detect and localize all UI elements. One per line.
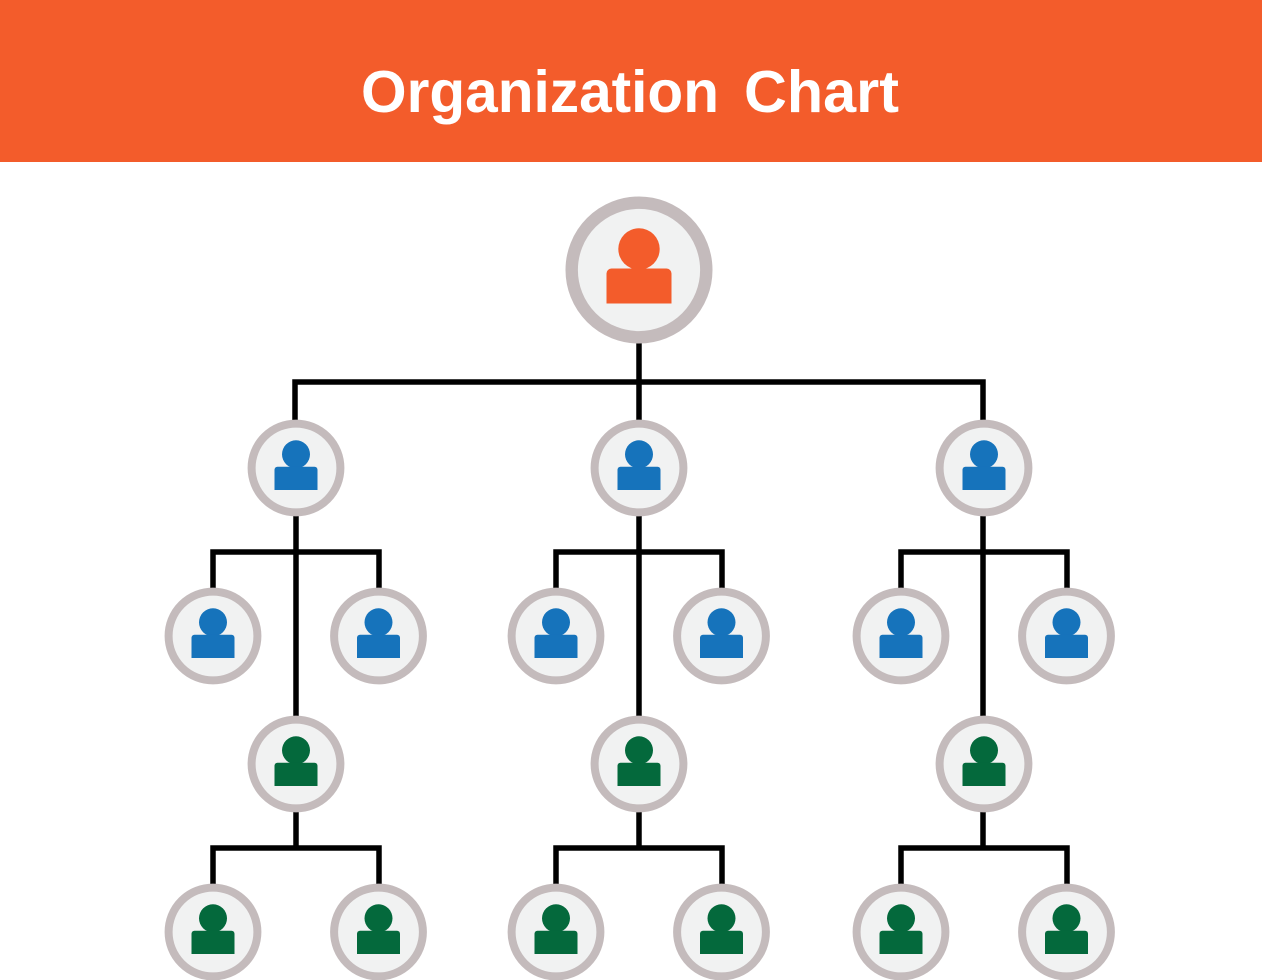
level 3 node 2 <box>334 592 423 680</box>
level 2 node: left <box>252 424 340 512</box>
level 4 node: left <box>252 720 340 808</box>
level 3 node 4 <box>677 592 766 680</box>
title <box>361 59 899 125</box>
level 4 node: right <box>940 720 1028 808</box>
level 2 node: centre <box>595 424 683 512</box>
level 3 node 6 <box>1022 592 1111 680</box>
header banner <box>0 0 1262 162</box>
level 5 node 5 <box>857 888 945 976</box>
top node: orange person <box>572 203 706 337</box>
level 5 node 4 <box>677 888 766 976</box>
level 5 node 2 <box>334 888 423 976</box>
level 3 node 5 <box>857 592 945 680</box>
level 4 node: centre <box>595 720 683 808</box>
connector lines <box>213 340 1067 886</box>
level 3 node 3 <box>512 592 600 680</box>
level 5 node 3 <box>512 888 600 976</box>
title: Organization <box>361 59 719 125</box>
level 5 node 6 <box>1022 888 1111 976</box>
level 5 node 1 <box>169 888 257 976</box>
level 3 node 1 <box>169 592 257 680</box>
title: Chart <box>744 59 899 125</box>
level 2 node: right <box>940 424 1028 512</box>
